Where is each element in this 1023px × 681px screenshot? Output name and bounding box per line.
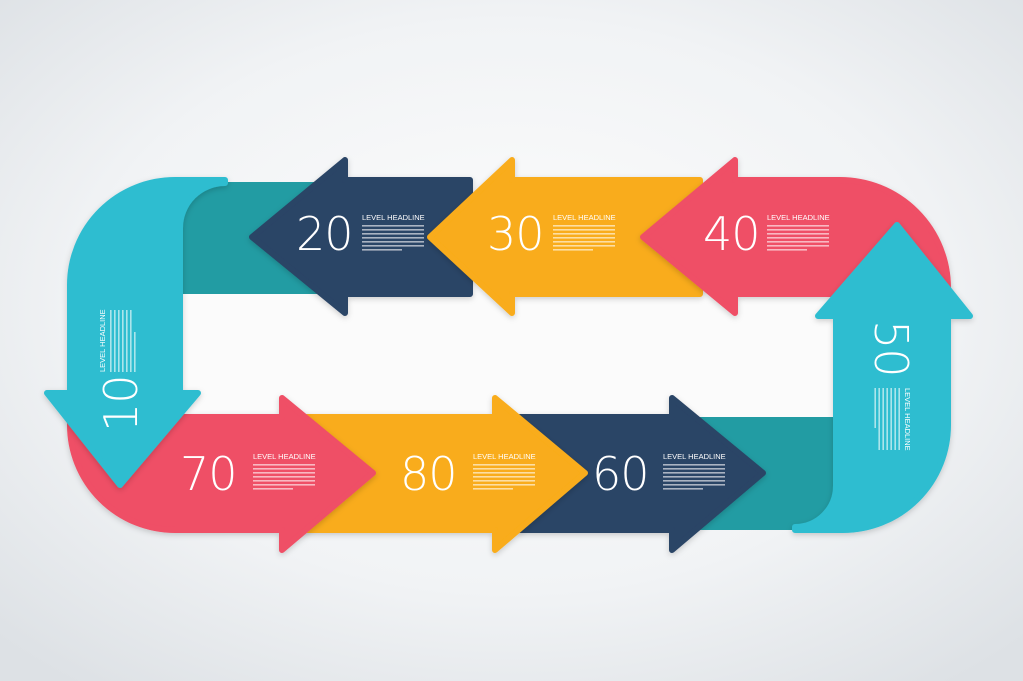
arrow 20 bbox=[252, 160, 470, 313]
inner white area bbox=[180, 294, 836, 417]
arrow 30 bbox=[430, 160, 700, 313]
arrow 80: LEVEL HEADLINE bbox=[473, 452, 536, 461]
arrow 40: 40 bbox=[703, 207, 760, 261]
arrow 70 bbox=[70, 398, 373, 550]
band: dark teal top bbox=[180, 182, 350, 294]
arrow 80 bbox=[300, 398, 585, 550]
arrow 70: LEVEL HEADLINE bbox=[253, 452, 316, 461]
arrow 60 bbox=[520, 398, 763, 550]
arrow 20: LEVEL HEADLINE bbox=[362, 213, 425, 222]
arrow 80: 80 bbox=[400, 447, 457, 501]
arrow 30: 30 bbox=[487, 207, 544, 261]
arrow 40: LEVEL HEADLINE bbox=[767, 213, 830, 222]
arrow 10 bbox=[47, 180, 225, 485]
arrow 30: LEVEL HEADLINE bbox=[553, 213, 616, 222]
arrow 50: LEVEL HEADLINE bbox=[903, 388, 912, 451]
arrow 10: LEVEL HEADLINE bbox=[98, 309, 107, 372]
band: dark teal bottom bbox=[690, 417, 840, 530]
arrow 50 bbox=[795, 225, 970, 530]
arrow 10: 10 bbox=[94, 375, 148, 432]
arrow 60: LEVEL HEADLINE bbox=[663, 452, 726, 461]
arrow 60: 60 bbox=[592, 447, 649, 501]
arrow 20: 20 bbox=[296, 207, 353, 261]
arrow 70: 70 bbox=[180, 447, 237, 501]
arrow 50: 50 bbox=[864, 320, 918, 377]
arrow 40 bbox=[643, 160, 948, 313]
